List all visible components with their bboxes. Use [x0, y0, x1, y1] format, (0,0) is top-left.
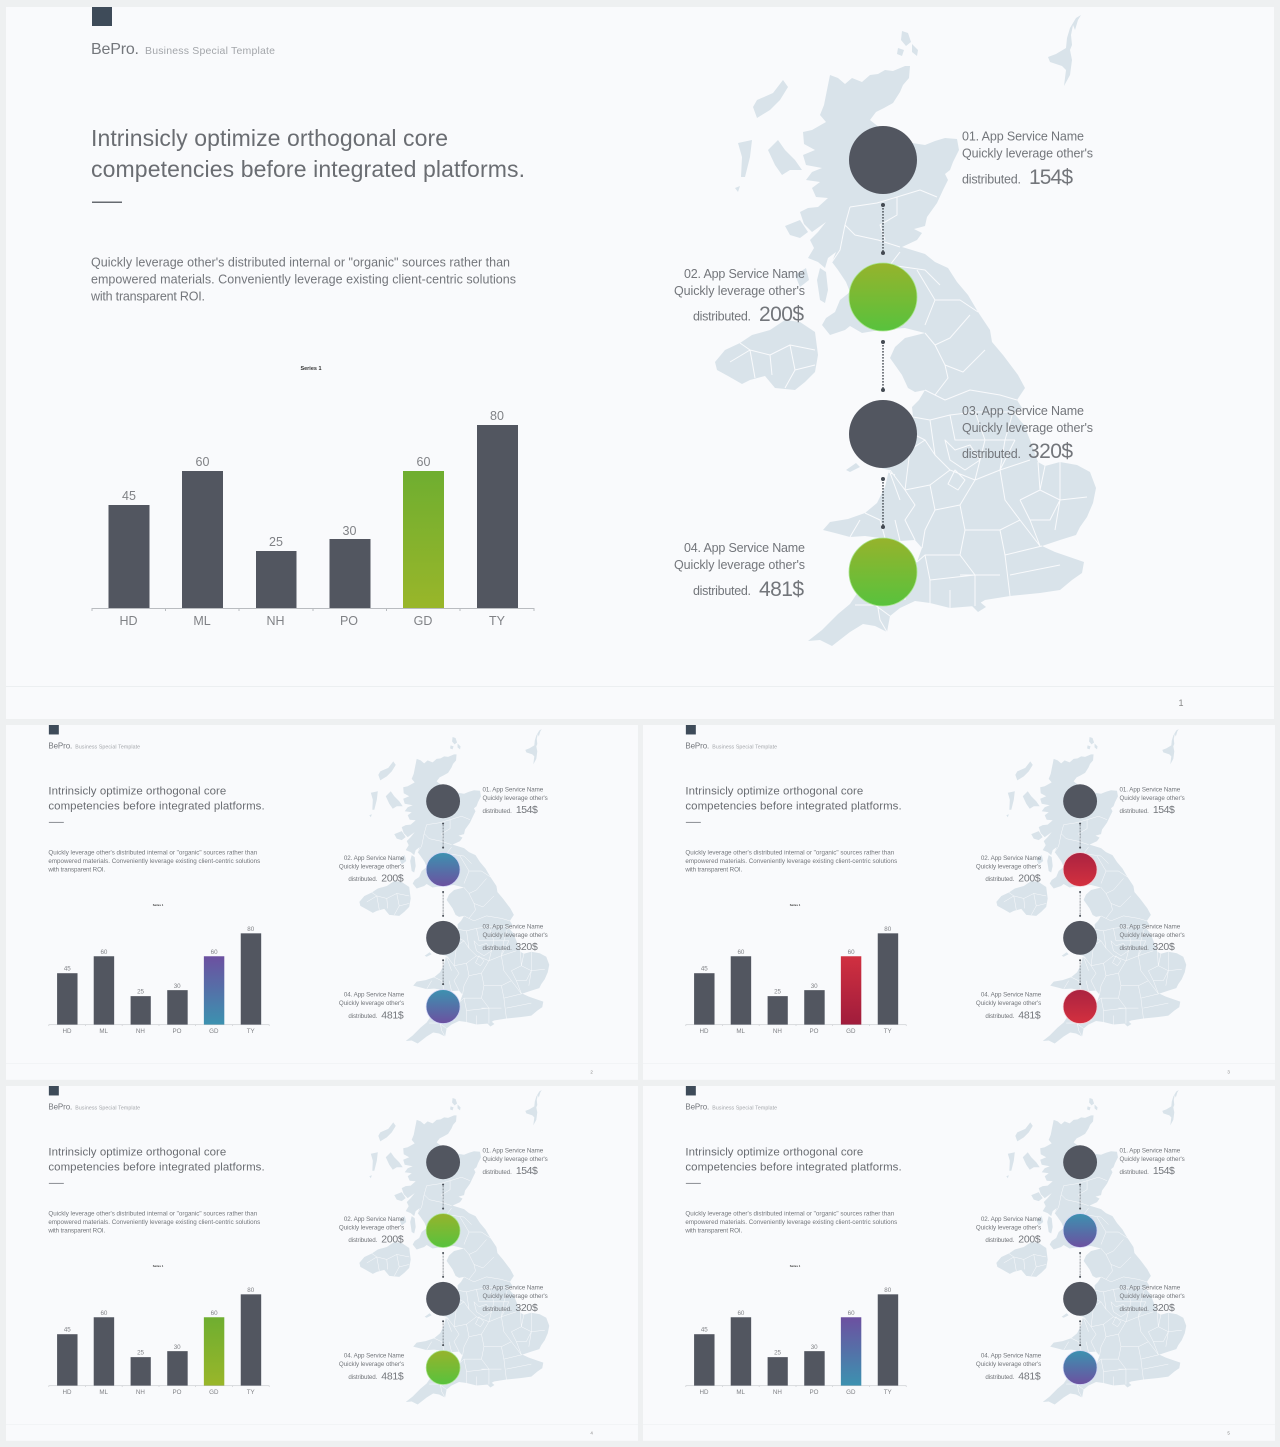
headline: competencies before integrated platforms. [48, 801, 265, 813]
category labels: HD [63, 1389, 72, 1396]
circle 4 [1063, 990, 1097, 1024]
logo square [92, 7, 112, 26]
bar chart [686, 1264, 906, 1396]
category labels: GD [209, 1028, 219, 1035]
callout 02: Quickly leverage other's [339, 1225, 404, 1232]
page number: 2 [590, 1069, 593, 1074]
value labels: 60 [196, 455, 209, 469]
callout 03 [482, 1284, 548, 1314]
value labels: 80 [490, 409, 504, 423]
page number: 3 [1227, 1069, 1230, 1074]
callout 04: distributed. [693, 584, 751, 598]
logo square [686, 725, 696, 734]
brand subtitle: Business Special Template [712, 1105, 777, 1111]
value labels [64, 1287, 255, 1357]
circle 2 [1063, 1214, 1097, 1247]
circle 3 [1063, 1282, 1097, 1316]
value labels: 30 [811, 1344, 818, 1351]
callout 01 [482, 1148, 548, 1177]
callout 04: distributed. [985, 1374, 1015, 1381]
value labels: 80 [884, 1287, 892, 1294]
connectors [1079, 823, 1081, 985]
callout 01: 01. App Service Name [482, 1148, 544, 1155]
brand name: BePro. [48, 741, 72, 750]
callout 01: 154$ [1029, 166, 1073, 189]
callout 04: distributed. [348, 1013, 378, 1020]
paragraph: empowered materials. Conveniently leverage existing client-centric solutions [91, 272, 516, 286]
callout 04: 481$ [381, 1372, 404, 1383]
callout 01: 01. App Service Name [482, 787, 544, 794]
connectors [442, 1184, 444, 1346]
footer rule [6, 686, 1274, 687]
axis [49, 1025, 269, 1026]
bars [694, 1294, 898, 1386]
headline: competencies before integrated platforms. [91, 156, 525, 182]
paragraph: empowered materials. Conveniently leverage existing client-centric solutions [48, 858, 260, 865]
callout 02 [976, 855, 1042, 884]
callout 04: 04. App Service Name [344, 992, 405, 999]
paragraph: with transparent ROI. [90, 290, 205, 304]
callout 03: 03. App Service Name [1119, 923, 1181, 930]
headline [685, 1146, 902, 1174]
value labels: 60 [211, 1310, 218, 1317]
paragraph: Quickly leverage other's distributed internal or "organic" sources rather than [685, 849, 895, 856]
callout 03: distributed. [1119, 1306, 1149, 1313]
callout 01: Quickly leverage other's [1119, 795, 1185, 802]
headline [48, 1146, 265, 1174]
callout 02: distributed. [985, 876, 1015, 883]
paragraph: empowered materials. Conveniently leverage existing client-centric solutions [685, 1219, 897, 1226]
callout 03: Quickly leverage other's [482, 932, 548, 939]
callout 04: Quickly leverage other's [339, 1000, 404, 1007]
value labels: 25 [137, 989, 145, 996]
paragraph [47, 849, 260, 873]
circle 4 [849, 538, 917, 606]
paragraph: with transparent ROI. [47, 1227, 105, 1234]
value labels: 60 [848, 1310, 855, 1317]
category labels: GD [846, 1389, 856, 1396]
value labels: 25 [774, 1350, 782, 1357]
callout 03: 320$ [1028, 440, 1073, 463]
headline: competencies before integrated platforms. [685, 801, 902, 813]
paragraph [684, 1210, 897, 1234]
callout 02: 200$ [1018, 1234, 1041, 1245]
callout 04: 04. App Service Name [981, 1353, 1042, 1360]
bar chart [686, 903, 906, 1035]
bars [57, 933, 261, 1025]
callout 03: distributed. [482, 945, 512, 952]
heading rule [49, 1182, 64, 1185]
callout 02: 02. App Service Name [344, 855, 405, 862]
slide background [643, 725, 1275, 1080]
callout 04 [339, 992, 405, 1022]
callout 01: 154$ [516, 805, 538, 816]
callout 04 [339, 1353, 405, 1383]
value labels: 60 [737, 1310, 745, 1317]
slide 2: blue variant [6, 725, 638, 1080]
callout 01: 01. App Service Name [1119, 1148, 1181, 1155]
callout 03: Quickly leverage other's [962, 421, 1093, 435]
category labels: GD [414, 614, 432, 628]
callout 02: Quickly leverage other's [339, 864, 404, 871]
brand name: BePro. [685, 741, 709, 750]
callout 03 [1119, 1284, 1185, 1314]
paragraph [47, 1210, 260, 1234]
slide 4: green variant [6, 1086, 638, 1441]
category labels: ML [99, 1389, 109, 1396]
slide 1: main green [6, 7, 1274, 719]
category labels: NH [136, 1389, 145, 1396]
category labels: ML [736, 1389, 746, 1396]
heading rule [92, 202, 122, 203]
callout 01: distributed. [1119, 808, 1149, 815]
callout 04: 04. App Service Name [684, 541, 805, 555]
callout 04: 481$ [381, 1011, 404, 1022]
page number: 1 [1178, 698, 1184, 708]
callout 02: 02. App Service Name [981, 1216, 1042, 1223]
callout 04: 481$ [759, 578, 804, 601]
category labels [700, 1389, 893, 1396]
callout 03: distributed. [1119, 945, 1149, 952]
circle 1 [849, 126, 917, 194]
page number: 4 [590, 1430, 593, 1435]
circle 3 [849, 400, 917, 468]
category labels: PO [809, 1028, 819, 1035]
circle 3 [1063, 921, 1097, 955]
category labels: NH [136, 1028, 145, 1035]
callout 03 [482, 923, 548, 953]
callout 03: 03. App Service Name [482, 1284, 544, 1291]
callout 01: 01. App Service Name [1119, 787, 1181, 794]
value labels: 45 [64, 1327, 71, 1334]
category labels: NH [266, 614, 285, 628]
footer rule [643, 1423, 1275, 1426]
category labels: GD [846, 1028, 856, 1035]
callout 01: distributed. [1119, 1169, 1149, 1176]
headline: Intrinsicly optimize orthogonal core [685, 785, 863, 797]
value labels: 60 [100, 949, 108, 956]
category labels: HD [63, 1028, 72, 1035]
category labels [700, 1028, 893, 1035]
category labels: PO [340, 614, 358, 628]
circle 3 [426, 921, 460, 955]
callout 01: distributed. [482, 1169, 512, 1176]
callout 03 [1119, 923, 1185, 953]
callout 03: Quickly leverage other's [1119, 932, 1185, 939]
callout 03: 320$ [515, 942, 538, 953]
paragraph: with transparent ROI. [684, 866, 742, 873]
value labels: 60 [100, 1310, 108, 1317]
footer rule [6, 1423, 638, 1426]
headline [91, 125, 525, 182]
UK map [359, 1090, 549, 1404]
UK map [359, 729, 549, 1043]
callout 02 [674, 267, 805, 326]
callout 02: Quickly leverage other's [976, 864, 1041, 871]
callout 02 [339, 855, 405, 884]
callout 02: 200$ [381, 1234, 404, 1245]
callout 02 [976, 1216, 1042, 1245]
category labels: PO [172, 1389, 182, 1396]
category labels: TY [247, 1028, 256, 1035]
callout 02 [339, 1216, 405, 1245]
category labels: TY [884, 1028, 893, 1035]
logo square [49, 725, 59, 734]
callout 01: distributed. [962, 172, 1021, 186]
circle 1 [426, 784, 460, 818]
value labels [122, 409, 504, 549]
category labels: HD [700, 1389, 709, 1396]
category labels [119, 614, 506, 628]
chart title: Series 1 [790, 1264, 801, 1268]
callout 03: 03. App Service Name [482, 923, 544, 930]
page number: 5 [1227, 1430, 1230, 1435]
axis [49, 1386, 269, 1387]
paragraph: Quickly leverage other's distributed internal or "organic" sources rather than [91, 256, 510, 270]
callout 02: 02. App Service Name [981, 855, 1042, 862]
value labels: 60 [848, 949, 855, 956]
connectors [442, 823, 444, 985]
value labels: 45 [701, 1327, 708, 1334]
paragraph: Quickly leverage other's distributed internal or "organic" sources rather than [48, 1210, 258, 1217]
category labels: PO [809, 1389, 819, 1396]
paragraph: Quickly leverage other's distributed internal or "organic" sources rather than [685, 1210, 895, 1217]
value labels: 60 [417, 455, 430, 469]
logo square [686, 1086, 696, 1095]
callout 03: Quickly leverage other's [1119, 1293, 1185, 1300]
callout 02: distributed. [693, 310, 751, 324]
callout 02: distributed. [348, 1237, 378, 1244]
category labels: NH [773, 1389, 782, 1396]
brand name: BePro. [685, 1102, 709, 1111]
value labels: 60 [737, 949, 745, 956]
headline [48, 785, 265, 813]
slide 3: red variant [643, 725, 1275, 1080]
callout 04: Quickly leverage other's [339, 1361, 404, 1368]
category labels [63, 1028, 256, 1035]
headline: Intrinsicly optimize orthogonal core [685, 1146, 863, 1158]
callout 04: Quickly leverage other's [976, 1000, 1041, 1007]
slide background [6, 7, 1274, 719]
bars [57, 1294, 261, 1386]
circle 4 [426, 1351, 460, 1385]
callout 04 [976, 992, 1042, 1022]
paragraph: empowered materials. Conveniently leverage existing client-centric solutions [685, 858, 897, 865]
paragraph [684, 849, 897, 873]
callout 02: 200$ [759, 303, 804, 326]
slide background [643, 1086, 1275, 1441]
paragraph: empowered materials. Conveniently leverage existing client-centric solutions [48, 1219, 260, 1226]
callout 02: 200$ [381, 873, 404, 884]
callout 01 [1119, 787, 1185, 816]
callout 03: distributed. [962, 447, 1021, 461]
callout 02: 02. App Service Name [344, 1216, 405, 1223]
heading rule [49, 821, 64, 824]
axis [92, 608, 534, 611]
callout 04: distributed. [985, 1013, 1015, 1020]
callout 03: Quickly leverage other's [482, 1293, 548, 1300]
bars [694, 933, 898, 1025]
brand subtitle: Business Special Template [712, 744, 777, 750]
callout 02: Quickly leverage other's [674, 284, 805, 298]
callout 03: 320$ [1152, 1303, 1175, 1314]
callout 02: Quickly leverage other's [976, 1225, 1041, 1232]
circle 1 [1063, 784, 1097, 818]
circle 2 [426, 1214, 460, 1247]
value labels: 30 [174, 983, 181, 990]
brand subtitle: Business Special Template [75, 1105, 140, 1111]
callout 04: 481$ [1018, 1011, 1041, 1022]
brand subtitle: Business Special Template [145, 45, 275, 57]
chart title: Series 1 [790, 903, 801, 907]
paragraph [90, 256, 516, 304]
callout 01: Quickly leverage other's [482, 1156, 548, 1163]
value labels [701, 926, 892, 996]
axis [686, 1386, 906, 1387]
bar chart [92, 366, 534, 628]
value labels: 25 [774, 989, 782, 996]
value labels: 80 [884, 926, 892, 933]
circle 2 [849, 263, 917, 331]
callout 04: 04. App Service Name [981, 992, 1042, 999]
connectors [1079, 1184, 1081, 1346]
brand name: BePro. [91, 41, 139, 58]
headline: competencies before integrated platforms. [685, 1162, 902, 1174]
chart title: Series 1 [153, 903, 164, 907]
value labels: 45 [64, 966, 71, 973]
footer rule [643, 1062, 1275, 1065]
UK map [715, 15, 1096, 646]
UK map [996, 1090, 1186, 1404]
value labels: 25 [269, 535, 283, 549]
callout 03: 320$ [1152, 942, 1175, 953]
category labels: TY [247, 1389, 256, 1396]
circle 2 [1063, 853, 1097, 886]
callout 01: Quickly leverage other's [962, 146, 1093, 160]
callout 01: 154$ [1153, 1166, 1175, 1177]
circle 3 [426, 1282, 460, 1316]
callout 01 [482, 787, 548, 816]
bar chart [49, 903, 269, 1035]
value labels: 30 [174, 1344, 181, 1351]
chart title: Series 1 [153, 1264, 164, 1268]
heading rule [686, 821, 701, 824]
callout 04: Quickly leverage other's [976, 1361, 1041, 1368]
paragraph: with transparent ROI. [47, 866, 105, 873]
circle 2 [426, 853, 460, 886]
logo square [49, 1086, 59, 1095]
category labels: NH [773, 1028, 782, 1035]
headline: Intrinsicly optimize orthogonal core [48, 1146, 226, 1158]
value labels: 60 [211, 949, 218, 956]
callout 02: 200$ [1018, 873, 1041, 884]
callout 03: 03. App Service Name [1119, 1284, 1181, 1291]
callout 02: distributed. [348, 876, 378, 883]
value labels: 25 [137, 1350, 145, 1357]
callout 01: Quickly leverage other's [482, 795, 548, 802]
callout 02: 02. App Service Name [684, 267, 805, 281]
callout 01: 01. App Service Name [962, 130, 1084, 144]
callout 01: Quickly leverage other's [1119, 1156, 1185, 1163]
category labels: HD [700, 1028, 709, 1035]
callout 04: 481$ [1018, 1372, 1041, 1383]
callout 01 [962, 130, 1093, 189]
callout 04: distributed. [348, 1374, 378, 1381]
callout 04: 04. App Service Name [344, 1353, 405, 1360]
chart title: Series 1 [300, 366, 322, 372]
value labels: 30 [343, 524, 356, 538]
circle 4 [1063, 1351, 1097, 1385]
connectors [881, 203, 885, 529]
value labels: 45 [122, 489, 136, 503]
circle 1 [426, 1145, 460, 1179]
callout 04 [976, 1353, 1042, 1383]
value labels: 80 [247, 926, 255, 933]
callout 01: 154$ [516, 1166, 538, 1177]
headline [685, 785, 902, 813]
value labels: 45 [701, 966, 708, 973]
value labels: 80 [247, 1287, 255, 1294]
callout 01: distributed. [482, 808, 512, 815]
headline: competencies before integrated platforms. [48, 1162, 265, 1174]
paragraph: with transparent ROI. [684, 1227, 742, 1234]
callout 03: 320$ [515, 1303, 538, 1314]
footer rule [6, 1062, 638, 1065]
bar chart [49, 1264, 269, 1396]
circle 1 [1063, 1145, 1097, 1179]
category labels: ML [99, 1028, 109, 1035]
slide background [6, 725, 638, 1080]
category labels: HD [119, 614, 138, 628]
slide 5: blue variant [643, 1086, 1275, 1441]
callout 02: distributed. [985, 1237, 1015, 1244]
callout 01: 154$ [1153, 805, 1175, 816]
brand subtitle: Business Special Template [75, 744, 140, 750]
bars [108, 425, 518, 608]
callout 04: Quickly leverage other's [674, 558, 805, 572]
callout 01 [1119, 1148, 1185, 1177]
headline: Intrinsicly optimize orthogonal core [91, 125, 448, 151]
brand name: BePro. [48, 1102, 72, 1111]
callout 04 [674, 541, 805, 601]
callout 03 [962, 404, 1093, 463]
category labels [63, 1389, 256, 1396]
category labels: ML [193, 614, 211, 628]
callout 03: distributed. [482, 1306, 512, 1313]
value labels [701, 1287, 892, 1357]
heading rule [686, 1182, 701, 1185]
category labels: TY [884, 1389, 893, 1396]
category labels: PO [172, 1028, 182, 1035]
category labels: TY [489, 614, 506, 628]
callout 03: 03. App Service Name [962, 404, 1084, 418]
axis [686, 1025, 906, 1026]
UK map [996, 729, 1186, 1043]
category labels: ML [736, 1028, 746, 1035]
headline: Intrinsicly optimize orthogonal core [48, 785, 226, 797]
value labels [64, 926, 255, 996]
paragraph: Quickly leverage other's distributed internal or "organic" sources rather than [48, 849, 258, 856]
category labels: GD [209, 1389, 219, 1396]
value labels: 30 [811, 983, 818, 990]
slide background [6, 1086, 638, 1441]
circle 4 [426, 990, 460, 1024]
